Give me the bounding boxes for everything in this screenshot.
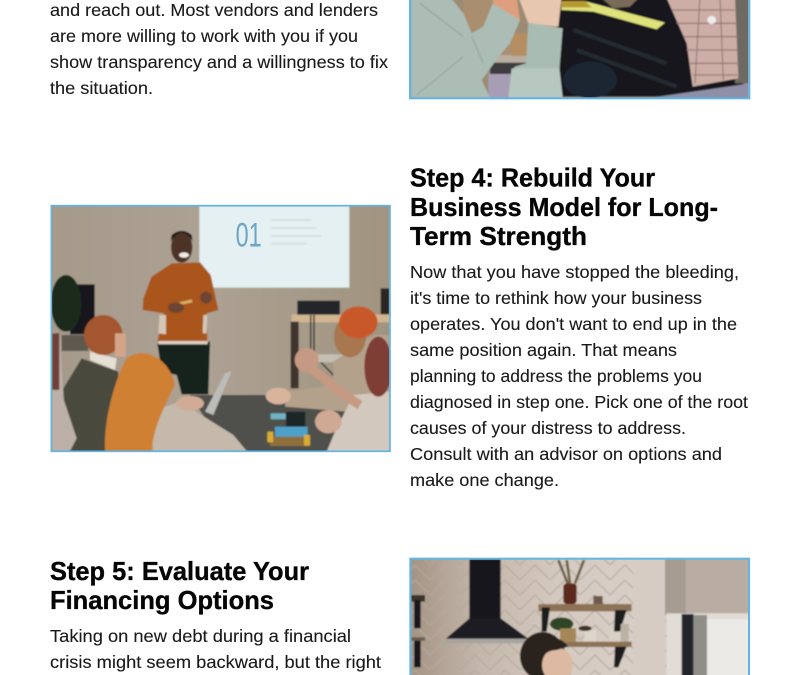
text block: step 5 body: Taking on new debt during a financial (50, 626, 351, 646)
photo: presenter in meeting room (50, 205, 392, 452)
text block: step 4 body: Consult with an advisor on options and (410, 444, 722, 464)
heading: step 5 (50, 556, 309, 615)
plaid shirt (666, 0, 738, 87)
heading: step 4: Step 4: Rebuild Your (410, 162, 655, 192)
jacket (411, 0, 520, 98)
open notebook (561, 2, 665, 29)
heading: step 4 (410, 162, 718, 251)
text block: step 4 body: diagnosed in step one. Pick one of the root (410, 392, 748, 412)
photo: people reviewing a notebook (410, 0, 750, 100)
text block: step 4 body: operates. You don't want to end up in the (410, 314, 737, 334)
photo: woman in kitchen (410, 558, 750, 675)
text block: step 5 body: crisis might seem backward, but the right (50, 652, 381, 672)
heading: step 4: Term Strength (410, 221, 587, 251)
text block: step 5 body (50, 626, 381, 672)
text block: step 4 body: causes of your distress to address. (410, 418, 686, 438)
text block: step 4 body: Now that you have stopped the bleeding, (410, 262, 739, 282)
text block: step 4 body: same position again. That means (410, 340, 677, 360)
heading: step 5: Financing Options (50, 585, 274, 615)
slide number: 01 (236, 217, 262, 255)
text block: step 3 closing paragraph: are more willing to work with you if you (50, 26, 358, 46)
heading: step 4: Business Model for Long- (410, 192, 718, 222)
text block: step 3 closing paragraph: the situation. (50, 78, 153, 98)
text block: step 3 closing paragraph: and reach out. Most vendors and lenders (50, 0, 378, 20)
text block: step 4 body: it's time to rethink how your business (410, 288, 702, 308)
text block: step 4 body (410, 262, 748, 490)
text block: step 4 body: planning to address the problems you (410, 366, 702, 386)
heading: step 5: Step 5: Evaluate Your (50, 556, 309, 586)
hands (492, 0, 520, 20)
text block: step 3 closing paragraph (50, 0, 388, 98)
text block: step 4 body: make one change. (410, 470, 559, 490)
text block: step 3 closing paragraph: show transparency and a willingness to fix (50, 52, 388, 72)
